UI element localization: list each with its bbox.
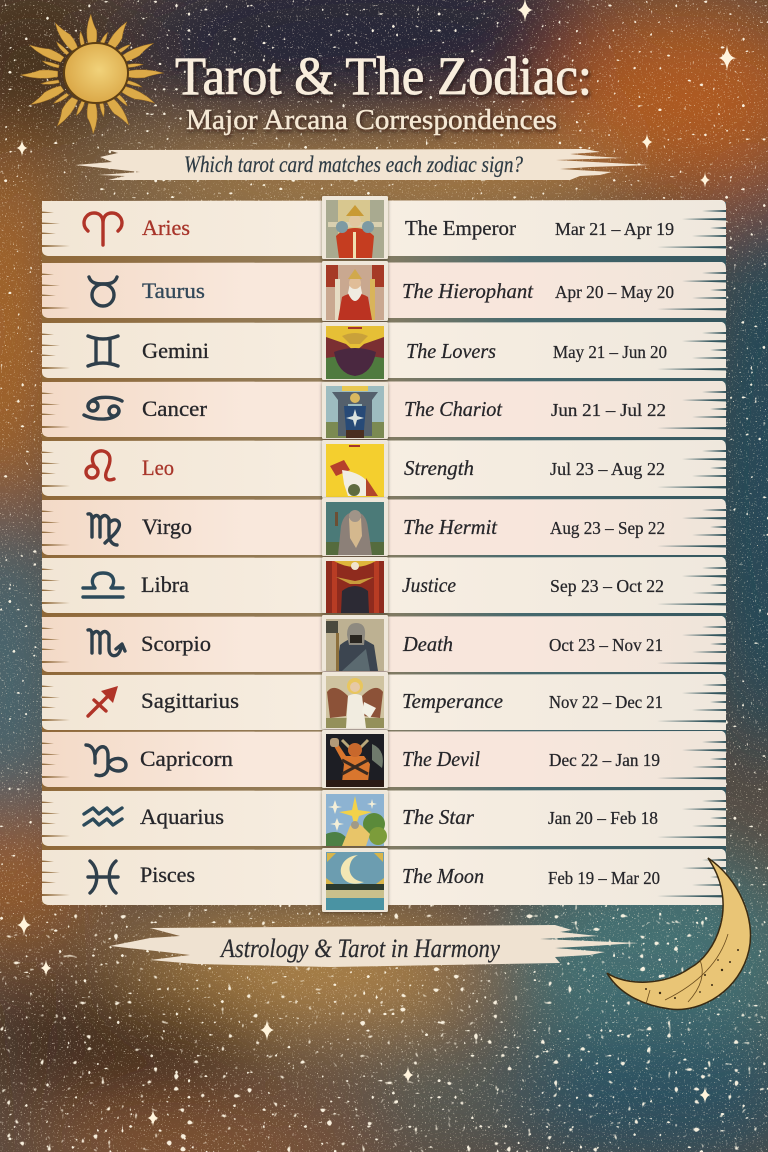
banner: footer tagline — [110, 925, 638, 967]
table backing strips — [42, 202, 726, 904]
row: Libra: Justice — [402, 573, 456, 597]
row: Sagittarius — [42, 674, 726, 730]
row: Sagittarius: Nov 22 – Dec 21 — [549, 692, 663, 712]
icon: crescent moon — [607, 858, 751, 1009]
card: The Devil — [322, 730, 388, 788]
row: Virgo — [42, 499, 726, 555]
row: Aries: Mar 21 – Apr 19 — [555, 219, 674, 239]
row: Aries: Aries — [142, 215, 190, 240]
icon: Pisces glyph — [88, 861, 118, 893]
row: Aquarius: The Star — [402, 805, 475, 829]
row: Capricorn: Capricorn — [140, 746, 233, 771]
row: Leo: Jul 23 – Aug 22 — [550, 459, 665, 479]
icon: Virgo glyph — [88, 514, 119, 545]
row: Capricorn: Dec 22 – Jan 19 — [549, 750, 660, 770]
card: The Lovers — [322, 322, 388, 380]
row: Aries: The Emperor — [405, 216, 516, 240]
row: Scorpio: Scorpio — [141, 631, 211, 656]
row: Pisces: Pisces — [140, 862, 195, 887]
icon: Aquarius glyph — [84, 808, 122, 825]
icon: Libra glyph — [83, 573, 123, 597]
row: Gemini: Gemini — [142, 338, 209, 363]
row: Leo: Strength — [404, 456, 474, 480]
card: Death — [322, 615, 388, 671]
row: Sagittarius: Temperance — [402, 689, 503, 713]
row: Taurus — [42, 262, 726, 318]
row: Libra: Libra — [141, 572, 189, 597]
row: Virgo: Virgo — [142, 514, 192, 539]
card: Strength — [322, 440, 388, 498]
icon: Aries glyph — [84, 213, 122, 245]
row: Aries — [42, 200, 726, 256]
row: Gemini: May 21 – Jun 20 — [553, 342, 667, 362]
row: Virgo: Aug 23 – Sep 22 — [550, 518, 665, 538]
icon: Capricorn glyph — [86, 745, 126, 776]
row: Aquarius: Aquarius — [140, 804, 224, 829]
row: Cancer: The Chariot — [404, 397, 503, 421]
card: Temperance — [322, 672, 388, 729]
card: The Moon — [322, 848, 388, 912]
row: Cancer — [42, 381, 726, 437]
card: Justice — [322, 557, 388, 613]
card: The Chariot — [322, 382, 388, 439]
icon: Leo glyph — [86, 451, 114, 480]
banner: question — [75, 149, 650, 180]
row: Sagittarius: Sagittarius — [141, 688, 239, 713]
card: The Star — [322, 790, 388, 846]
icon: Sagittarius glyph — [88, 686, 118, 716]
row: Pisces: Feb 19 – Mar 20 — [548, 868, 660, 888]
row: Capricorn: The Devil — [402, 747, 480, 771]
card: The Hierophant — [322, 261, 388, 321]
row: Gemini: The Lovers — [406, 339, 496, 363]
card: The Hermit — [322, 498, 388, 556]
banner: footer tagline: Astrology & Tarot in Harmony — [219, 934, 500, 963]
title: Tarot & The Zodiac: — [175, 46, 592, 106]
row: Cancer: Cancer — [142, 396, 208, 421]
row: Leo: Leo — [142, 455, 174, 480]
row: Aquarius: Jan 20 – Feb 18 — [548, 808, 658, 828]
icon: Cancer glyph — [84, 397, 122, 419]
row: Leo — [42, 440, 726, 496]
row: Taurus: The Hierophant — [402, 279, 534, 303]
row: Virgo: The Hermit — [403, 515, 498, 539]
row: Scorpio: Oct 23 – Nov 21 — [549, 635, 663, 655]
icon: Scorpio glyph — [88, 630, 125, 656]
row: Libra — [42, 557, 726, 613]
row: Pisces: The Moon — [402, 864, 484, 888]
row: Pisces — [42, 849, 726, 905]
row: Scorpio: Death — [402, 632, 453, 656]
row: Gemini — [42, 322, 726, 378]
row: Aquarius — [42, 790, 726, 846]
row: Cancer: Jun 21 – Jul 22 — [551, 400, 666, 420]
subtitle: Major Arcana Correspondences — [186, 105, 557, 136]
icon: Taurus glyph — [89, 277, 117, 306]
banner: question: Which tarot card matches each zodiac sign? — [184, 152, 523, 177]
row: Scorpio — [42, 616, 726, 672]
row: Taurus: Taurus — [142, 278, 205, 303]
row: Taurus: Apr 20 – May 20 — [555, 282, 674, 302]
row: Capricorn — [42, 731, 726, 787]
icon: sun — [20, 14, 164, 134]
row: Libra: Sep 23 – Oct 22 — [550, 576, 664, 596]
card: The Emperor — [322, 196, 388, 259]
icon: Gemini glyph — [88, 336, 118, 366]
